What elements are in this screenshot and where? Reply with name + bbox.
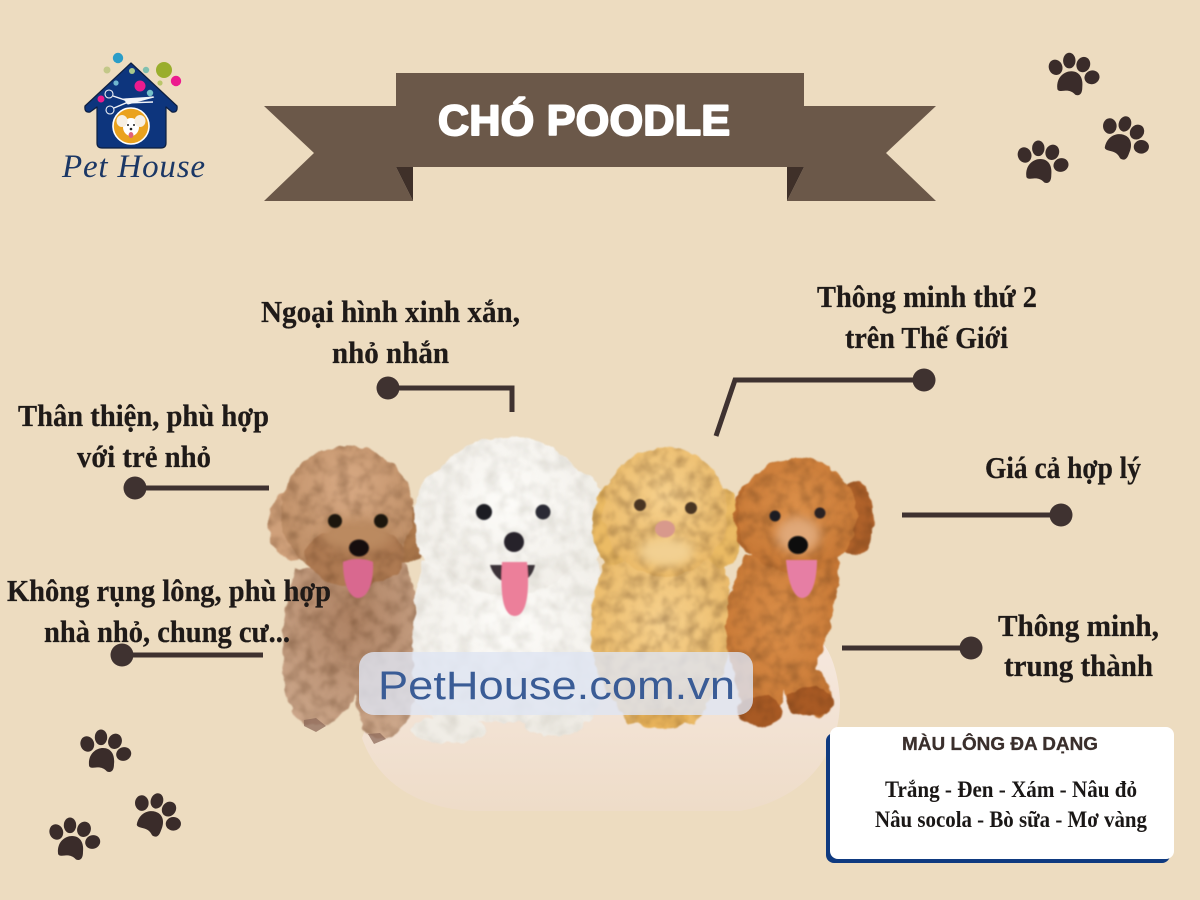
front paws bbox=[304, 718, 386, 744]
title: CHÓ POODLE bbox=[438, 96, 730, 145]
colour list: Nâu socola - Bò sữa - Mơ vàng bbox=[875, 807, 1147, 832]
ribbon right fold bbox=[787, 167, 804, 201]
icon: house bbox=[85, 63, 177, 148]
watermark: PetHouse.com.vn: PetHouse.com.vn bbox=[378, 664, 735, 708]
dog: white bichon-like poodle bbox=[411, 436, 607, 743]
callout: Ngoại hình: Ngoại hình xinh xắn, bbox=[261, 294, 520, 329]
callout: Thông minh thứ 2: Thông minh thứ 2 bbox=[817, 279, 1037, 314]
pedestal shape behind dogs bbox=[362, 640, 840, 811]
callout: Ngoại hình: nhỏ nhắn bbox=[332, 335, 449, 370]
callout: Không rụng lông: Không rụng lông, phù hợp bbox=[7, 573, 331, 608]
callout: Thông minh, trung thành: trung thành bbox=[1004, 648, 1153, 683]
dog: brown poodle bbox=[268, 446, 428, 744]
paw prints top right bbox=[1016, 53, 1158, 183]
callout: Thông minh, trung thành: Thông minh, bbox=[998, 608, 1159, 643]
icon: dog badge bbox=[113, 108, 149, 144]
callout: Thân thiện bbox=[18, 398, 269, 500]
icon: scissors bbox=[105, 90, 154, 114]
callout: Không rụng lông: nhà nhỏ, chung cư... bbox=[44, 614, 290, 649]
dog: red brown poodle bbox=[726, 458, 874, 726]
callout: Giá cả bbox=[902, 450, 1141, 526]
ribbon left tail bbox=[264, 106, 413, 201]
callout: Thông minh, trung thành bbox=[842, 608, 1159, 683]
icon: coloured bubbles bbox=[104, 53, 181, 86]
callout: Không rụng lông bbox=[7, 573, 331, 666]
icon: dots on house bbox=[98, 68, 153, 102]
callout: Thân thiện: Thân thiện, phù hợp bbox=[18, 398, 269, 433]
watermark: PetHouse.com.vn bbox=[359, 652, 753, 715]
callout: Giá cả: Giá cả hợp lý bbox=[985, 450, 1141, 485]
colour list bbox=[875, 777, 1147, 832]
title ribbon bbox=[264, 73, 936, 201]
callout: Thông minh thứ 2 bbox=[716, 279, 1037, 436]
logo wordmark: Pet House bbox=[61, 149, 205, 185]
panel: màu lông bbox=[826, 727, 1174, 863]
ribbon centre bbox=[396, 73, 804, 167]
colour list: Trắng - Đen - Xám - Nâu đỏ bbox=[885, 777, 1137, 802]
paw prints bottom left bbox=[47, 730, 190, 860]
ribbon left fold bbox=[396, 167, 413, 201]
panel heading: MÀU LÔNG ĐA DẠNG bbox=[902, 733, 1098, 754]
callout: Thân thiện: với trẻ nhỏ bbox=[77, 439, 211, 474]
logo: Pet House bbox=[61, 53, 205, 185]
callout: Ngoại hình bbox=[261, 294, 520, 412]
callout: Thông minh thứ 2: trên Thế Giới bbox=[845, 320, 1008, 355]
ribbon right tail bbox=[787, 106, 936, 201]
dog: apricot poodle bbox=[591, 447, 742, 728]
